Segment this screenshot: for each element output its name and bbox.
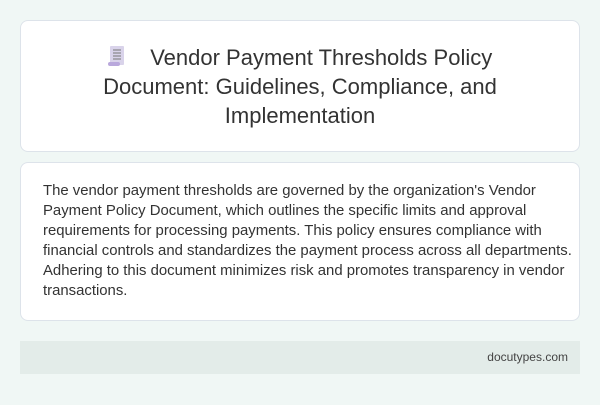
text block: transactions. — [43, 283, 127, 299]
title: Vendor Payment Thresholds Policy Document: Guidelines, Compliance, and Implementation — [103, 44, 497, 128]
text block: Adhering to this document minimizes risk and promotes transparency in vendor — [43, 263, 564, 279]
title panel — [20, 20, 580, 152]
footer — [20, 341, 580, 374]
panel: description — [20, 162, 580, 321]
text block: The vendor payment thresholds are governed by the organization's Vendor — [43, 183, 536, 199]
text block: requirements for processing payments. This policy ensures compliance with — [43, 223, 542, 239]
text block — [43, 183, 572, 299]
text block: Payment Policy Document, which outlines the specific limits and approval — [43, 203, 526, 219]
text block: financial controls and standardizes the payment process across all departments. — [43, 243, 572, 259]
footer: docutypes.com — [487, 350, 568, 364]
